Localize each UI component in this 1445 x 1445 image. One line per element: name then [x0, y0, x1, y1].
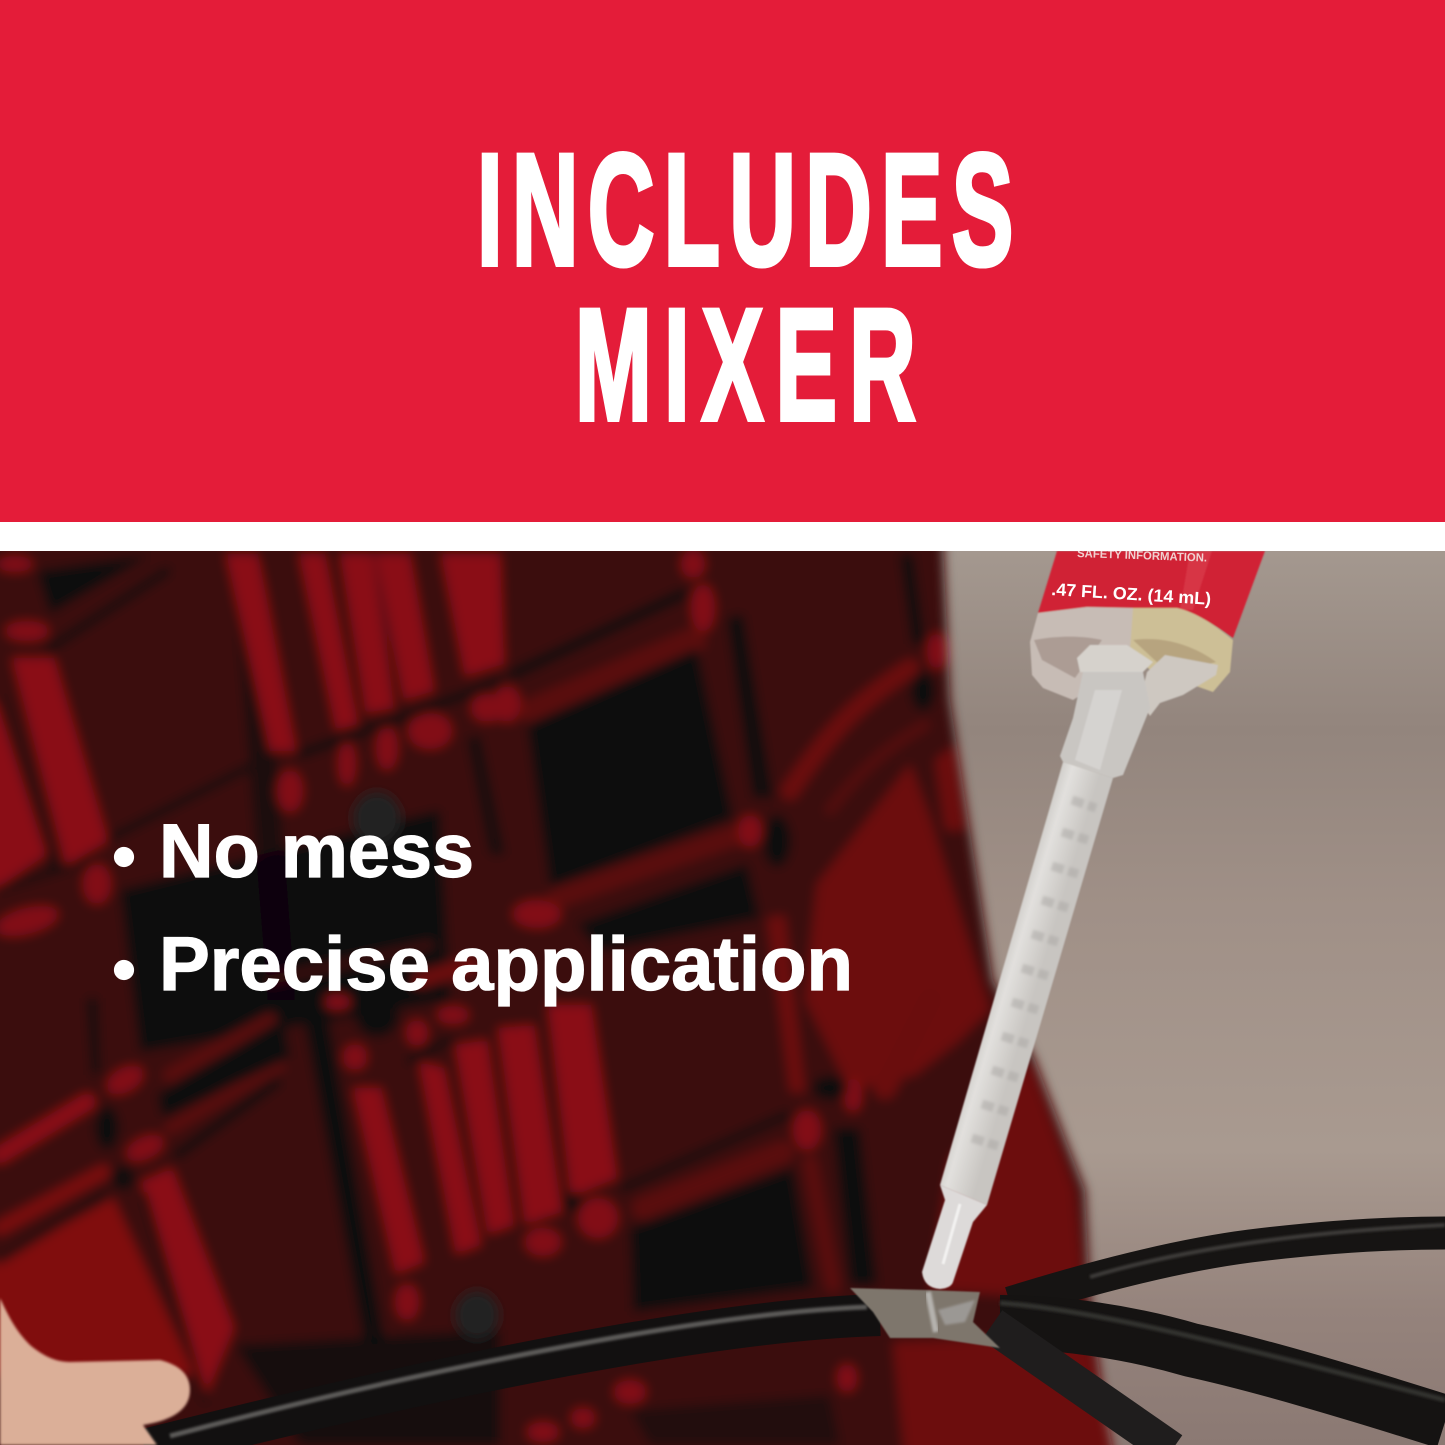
- white divider band: [0, 522, 1445, 551]
- shirt buttons: [353, 792, 499, 1339]
- mixer collar and cap: [1140, 655, 1218, 716]
- photo background wall: [935, 551, 1445, 1445]
- tube of adhesive: [922, 551, 1265, 1289]
- clear resin chamber: [1030, 607, 1135, 700]
- red header banner: [0, 0, 1445, 522]
- bright red tiles: [0, 554, 617, 1398]
- lower right thick cable: [1000, 1322, 1445, 1422]
- adhesive repair joint: [850, 1288, 1000, 1348]
- photo: plaid shirt with mixer nozzle on cable: [0, 540, 1445, 1445]
- plaid shirt: [0, 540, 1115, 1445]
- red lozenges at plaid crossings: [0, 550, 947, 1442]
- title: MIXER: [575, 275, 928, 454]
- hand at lower left: [0, 1298, 190, 1445]
- black cables with repaired joint: [145, 1225, 1445, 1445]
- upper right cable: [1010, 1233, 1445, 1303]
- bullet list: [114, 809, 853, 1007]
- tube label text: .47 FL. OZ. (14 mL): [1051, 579, 1212, 609]
- tube label text: [1051, 548, 1212, 609]
- bullet: no mess: No mess: [159, 809, 474, 894]
- title: INCLUDES: [477, 120, 1023, 299]
- bullet: precise application: Precise application: [159, 922, 853, 1007]
- black tiles and lines: [37, 554, 935, 1445]
- tube label text: SAFETY INFORMATION.: [1077, 548, 1207, 565]
- right hand red block: [767, 745, 1115, 1445]
- amber hardener chamber: [1130, 608, 1233, 692]
- mixer nozzle long body: [940, 762, 1113, 1205]
- mixer nozzle tip: [922, 1185, 987, 1289]
- narrow lighter maroon bands: [0, 641, 930, 1285]
- tube red label: [1038, 551, 1265, 638]
- left cable: [145, 1315, 880, 1445]
- title: [477, 120, 1023, 454]
- mixer nozzle base: [1060, 672, 1150, 778]
- lower branch cable: [992, 1325, 1172, 1445]
- dark zone around the text: [120, 551, 450, 1052]
